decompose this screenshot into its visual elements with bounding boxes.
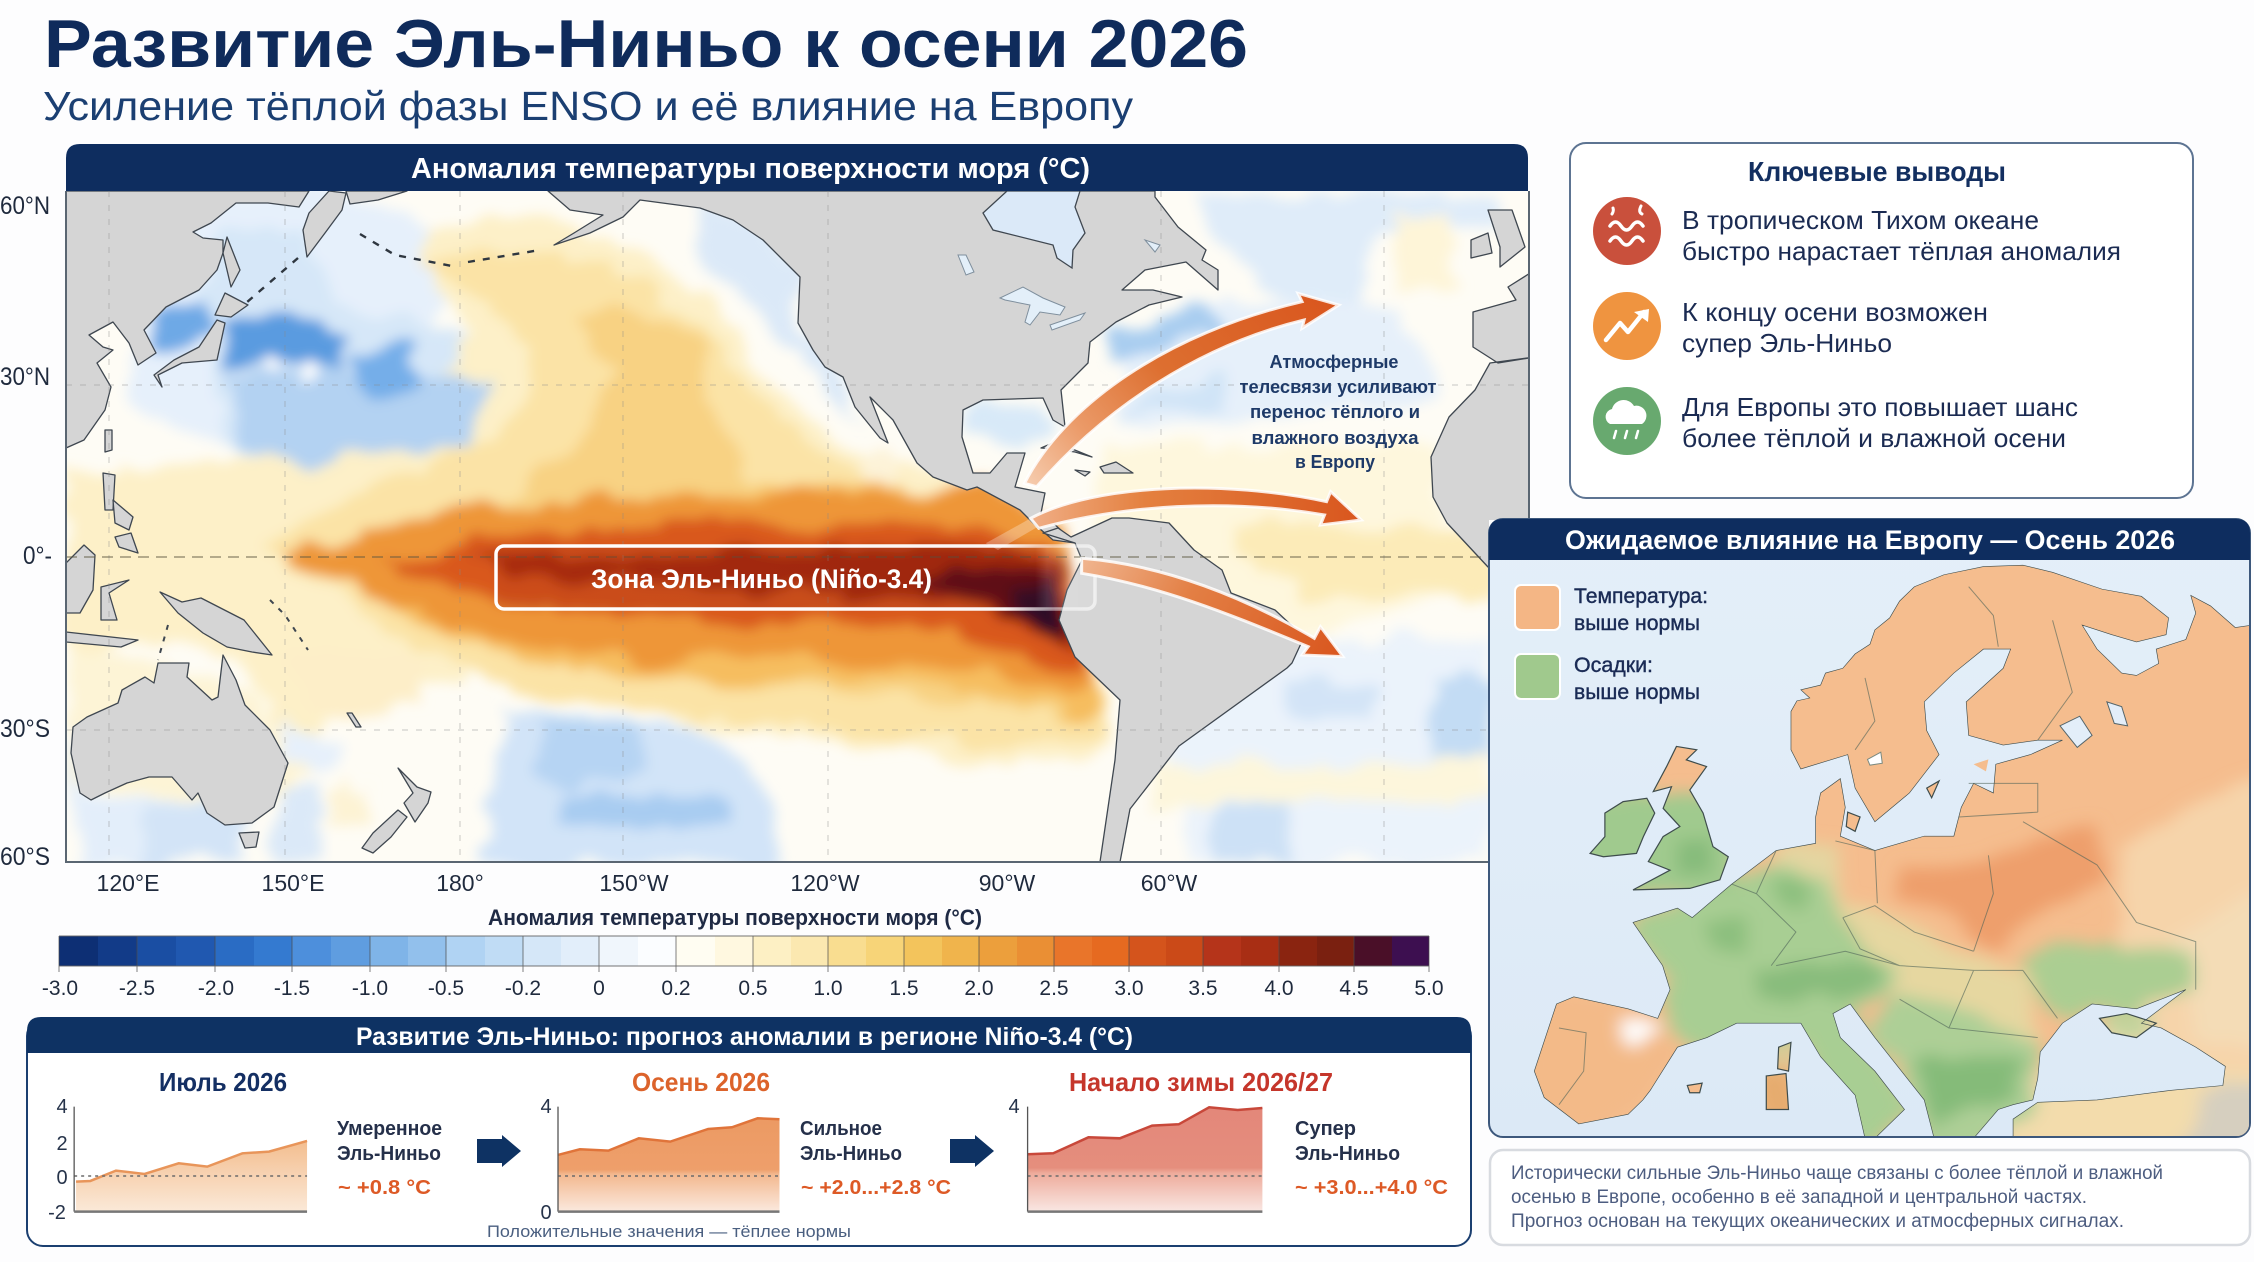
Sakhalin [223,237,240,287]
map frame [66,191,1529,862]
island chains [246,234,540,303]
Philippines [103,473,115,510]
colour scale title: Аномалия температуры поверхности моря (°C) [488,905,982,930]
chart: early winter 2026/27: Супер [1295,1118,1356,1140]
latitude labels: 0°- [23,542,52,570]
New Zealand [398,768,431,822]
arrow to mid Atlantic [1031,488,1361,528]
map header [66,144,1528,191]
Japan [154,320,225,387]
legend: temperature: Температура: [1574,585,1708,608]
Asia [66,191,309,448]
chart: early winter 2026/27: 4 [1008,1096,1020,1118]
colour scale labels: 2.5 [1039,977,1069,1000]
chart: autumn 2026: Осень 2026 [632,1067,770,1097]
note box: Исторически сильные Эль-Ниньо чаще связаны с более тёплой и влажной [1511,1163,2163,1184]
takeaway 1: быстро нарастает тёплая аномалия [1682,236,2121,266]
Europe panel header [1489,519,2250,560]
chart: autumn 2026: Сильное [800,1118,882,1140]
North America [548,191,1218,543]
British Isles [1471,233,1492,258]
colour scale labels [42,977,1444,1000]
chart: July 2026: 0 [56,1167,68,1189]
colour scale labels: 2.0 [964,977,994,1000]
colour scale labels: 4.0 [1264,977,1294,1000]
longitude labels [97,870,1198,896]
Great Lakes [1000,287,1065,325]
Australia [71,655,288,825]
glow rays [986,518,1041,550]
longitude labels: 150°W [599,870,669,896]
pale blue north [124,191,446,442]
chart: autumn 2026: ~ +2.0...+2.8 °C [801,1177,951,1199]
takeaway 3 [1682,392,2078,453]
colour scale labels: 3.5 [1188,977,1218,1000]
Europe coastline [1534,565,2252,1138]
chart: July 2026: 4 [56,1096,68,1118]
colour scale labels: 0.2 [661,977,691,1000]
chart: early winter 2026/27: Эль-Ниньо [1295,1143,1400,1165]
warm base [66,215,1110,770]
map header: Аномалия температуры поверхности моря (°C) [411,153,1090,185]
legend: precipitation: Осадки: [1574,654,1653,677]
takeaways heading: Ключевые выводы [1748,156,2006,187]
Europe land [1534,564,2249,1136]
takeaway 2 [1682,297,1988,358]
blues [225,365,490,462]
icon: rain cloud [1593,387,1661,455]
takeaway 3: более тёплой и влажной осени [1682,423,2066,453]
Niño-3.4 zone box: Зона Эль-Ниньо (Niño-3.4) [591,564,932,594]
annotation: teleconnections: телесвязи усиливают [1240,376,1436,397]
Hudson Bay [983,191,1085,268]
longitude labels: 120°E [97,870,159,896]
latitude labels: 30°S [0,715,50,743]
takeaway 1 [1682,205,2121,266]
chart: July 2026: ~ +0.8 °C [338,1177,431,1199]
map grid lines [66,191,1529,862]
Caribbean islands [1041,442,1092,457]
Niño-3.4 zone box [496,546,1095,609]
colour scale labels: 1.5 [889,977,919,1000]
legend: precipitation: выше нормы [1574,681,1700,704]
chart: July 2026: Эль-Ниньо [337,1143,441,1165]
colour scale labels: 1.0 [813,977,843,1000]
arrow to north Atlantic [1025,293,1339,487]
map ocean heat field [66,190,1529,865]
colour scale labels: 3.0 [1114,977,1144,1000]
panel: Europe impact map [1480,510,2254,1181]
legend: temperature [1515,585,1708,635]
chart: July 2026: -2 [48,1202,66,1224]
arrow to south Atlantic [1082,558,1343,657]
note box: осенью в Европе, особенно в её западной и центральной частях. [1511,1187,2087,1208]
Kamchatka [303,191,346,257]
chart: autumn 2026: 4 [540,1096,552,1118]
longitude labels: 90°W [979,870,1036,896]
annotation: teleconnections: Атмосферные [1270,351,1398,372]
chart: July 2026: 2 [56,1133,68,1155]
land masses [66,191,1540,862]
takeaway 2: К концу осени возможен [1682,297,1988,327]
arrow: July to autumn [477,1135,521,1167]
borders [1559,587,2196,1105]
latitude labels [0,192,52,871]
takeaway 1: В тропическом Тихом океане [1682,205,2039,235]
chart: July 2026: Июль 2026 [159,1067,287,1097]
chart: early winter 2026/27: ~ +3.0...+4.0 °C [1295,1177,1448,1199]
annotation: teleconnections: влажного воздуха [1252,427,1419,448]
chart: early winter 2026/27 [1008,1067,1448,1212]
annotation: teleconnections [1240,351,1436,472]
icon: warm waves [1593,197,1661,265]
latitude labels: 60°N [0,192,50,220]
legend: precipitation [1515,654,1700,704]
note box: Прогноз основан на текущих океанических и атмосферных сигналах. [1511,1211,2124,1232]
annotation: teleconnections: в Европу [1295,451,1376,472]
latitude labels: 60°S [0,843,50,871]
takeaway 3: Для Европы это повышает шанс [1682,392,2078,422]
South America [1043,518,1304,862]
chart: July 2026: Умеренное [337,1118,442,1140]
colour scale bar [59,936,1429,972]
longitude labels: 60°W [1141,870,1198,896]
Europe panel header: Ожидаемое влияние на Европу — Осень 2026 [1565,525,2175,555]
forecast header [27,1017,1471,1053]
panel: Niño-3.4 forecast [27,1017,1471,1246]
subtitle: Усиление тёплой фазы ENSO и её влияние на Европу [43,83,1134,129]
colour scale labels: -2.5 [119,977,155,1000]
arrow: autumn to winter [950,1135,994,1167]
panel: sea surface temperature anomaly map [66,190,1540,865]
icon: rising trend [1593,292,1661,360]
note box [1490,1150,2250,1245]
chart: autumn 2026: 0 [540,1202,552,1224]
colour scale labels: -0.2 [505,977,541,1000]
colour scale labels: 0 [593,977,605,1000]
colour scale labels: -0.5 [428,977,464,1000]
lakes [2060,716,2092,747]
annotation: teleconnections: перенос тёплого и [1250,401,1420,422]
Indonesia and New Guinea [66,545,95,613]
chart: July 2026 [48,1067,442,1224]
takeaway 2: супер Эль-Ниньо [1682,328,1892,358]
Europe and Africa [1430,274,1528,568]
longitude labels: 120°W [790,870,860,896]
colour scale labels: 0.5 [738,977,768,1000]
chart: autumn 2026: Эль-Ниньо [800,1143,902,1165]
legend: temperature: выше нормы [1574,612,1700,635]
longitude labels: 150°E [262,870,324,896]
title: Развитие Эль-Ниньо к осени 2026 [44,6,1248,82]
colour scale labels: -1.0 [352,977,388,1000]
colour scale labels: 5.0 [1414,977,1444,1000]
colour scale labels: -3.0 [42,977,78,1000]
chart footnote: Положительные значения — тёплее нормы [487,1222,851,1241]
chart: autumn 2026 [540,1067,951,1224]
chart: early winter 2026/27: Начало зимы 2026/27 [1069,1067,1333,1097]
panel: key takeaways [1570,143,2193,498]
colour scale labels: -2.0 [198,977,234,1000]
longitude labels: 180° [436,870,484,896]
forecast header: Развитие Эль-Ниньо: прогноз аномалии в регионе Niño-3.4 (°C) [356,1023,1133,1051]
arrows: teleconnections [986,293,1361,657]
south Pacific blues [480,710,780,865]
colour scale labels: -1.5 [274,977,310,1000]
colour scale labels: 4.5 [1339,977,1369,1000]
latitude labels: 30°N [0,363,50,391]
